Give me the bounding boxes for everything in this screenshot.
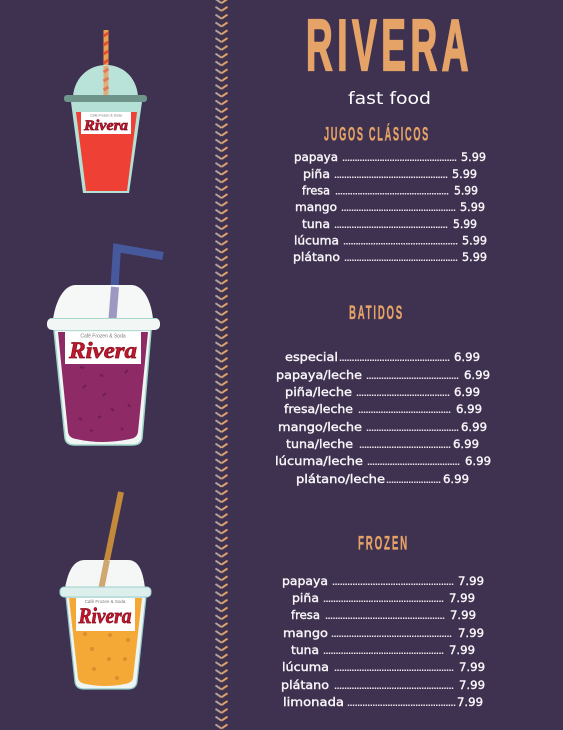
lid rim [60,587,151,597]
logo label: Rivera [78,603,132,628]
price list: jugos clásicos: 5.99 [462,234,487,248]
dome lid [65,560,145,588]
price list: batidos: especial [285,351,338,364]
price list: batidos: 6.99 [456,403,482,416]
price list: batidos: 6.99 [464,369,490,382]
straw seen through lid [104,66,108,96]
price list: frozen: plátano [281,679,329,692]
logo label: Café Frozen & Soda [80,334,126,340]
price list: batidos [275,351,491,486]
logo label: Café Frozen & Soda [85,599,126,604]
price list: jugos clásicos [293,151,487,264]
price list: jugos clásicos: .............................................. [334,221,448,230]
price list: jugos clásicos: .............................................. [341,204,456,213]
lid rim [47,318,160,330]
price list: jugos clásicos: .............................................. [334,171,448,180]
price list: frozen: ................................................ [323,647,444,656]
rim line [50,318,157,320]
fruit specks [83,632,130,680]
price list: frozen: limonada [283,696,344,709]
price list: batidos: ...................... [386,476,441,485]
logo label: Rivera [83,118,129,134]
logo label: Café Frozen & Soda [90,114,122,118]
logo label [76,598,135,631]
price list: frozen: ................................................ [331,630,452,639]
price list: batidos: mango/leche [278,421,362,434]
price list: frozen: ................................................ [334,682,454,691]
price list: frozen: piña [292,592,319,605]
drink: red juice cup [64,30,147,193]
price list: frozen: mango [283,627,328,640]
fruit specks [79,367,130,431]
price list: jugos clásicos: mango [295,201,337,214]
price list: jugos clásicos: piña [303,168,330,181]
straw seen through lid [100,560,107,595]
purple liquid [58,332,148,442]
price list: frozen: 7.99 [449,644,475,657]
chevron divider [215,0,229,730]
logo label: Rivera [68,338,137,363]
price list: jugos clásicos: 5.99 [462,251,487,264]
price list: batidos: piña/leche [285,386,352,399]
cup body [66,597,146,689]
price list: jugos clásicos: 5.99 [454,184,478,198]
price list: frozen: ........................................... [347,699,456,708]
blue bent straw [112,248,163,325]
price list: batidos: tuna/leche [286,438,353,451]
price list: jugos clásicos: 5.99 [452,168,477,181]
price list: jugos clásicos: .............................................. [335,188,449,196]
logo label [81,112,131,134]
price list: batidos: ..................................... [356,389,450,398]
heading: batidos: BATIDOS [349,303,404,324]
price list: jugos clásicos: 5.99 [461,151,486,164]
price list: frozen: 7.99 [457,696,483,709]
price list: batidos: ..................................... [359,441,451,450]
price list: frozen: lúcuma [282,661,329,674]
cup body [71,102,142,193]
drink: purple smoothie cup [47,248,163,445]
price list: batidos: fresa/leche [284,403,353,416]
price list: batidos: plátano/leche [296,473,385,486]
price list: jugos clásicos: lúcuma [294,234,339,248]
price list: frozen: fresa [291,609,320,622]
price list: batidos: ............................................ [339,354,450,363]
price list: frozen: 7.99 [458,627,484,640]
price list: batidos: 6.99 [443,473,469,486]
price list: batidos: lúcuma/leche [275,455,363,468]
drink: orange juice cup [60,492,151,689]
price list: batidos: ..................................... [366,424,459,433]
text: JUGOS CLÁSICOS [324,124,430,146]
price list: jugos clásicos: papaya [294,151,338,164]
subtitle: fast food [348,89,431,109]
price list: jugos clásicos: 5.99 [460,201,485,214]
cup body [54,330,151,445]
price list: frozen: tuna [291,644,319,657]
price list: frozen [281,575,485,709]
price list: jugos clásicos: tuna [302,218,330,231]
price list: frozen: ................................................ [325,612,445,621]
price list: batidos: 6.99 [461,421,487,434]
price list: jugos clásicos: .............................................. [344,254,458,263]
price list: batidos: papaya/leche [276,369,362,382]
price list: batidos: 6.99 [465,455,491,468]
price list: frozen: papaya [282,575,328,588]
price list: batidos: ..................................... [366,372,459,381]
price list: jugos clásicos: fresa [302,184,330,198]
price list: jugos clásicos: .............................................. [342,154,457,163]
price list: jugos clásicos: .............................................. [343,238,458,246]
heading: frozen: FROZEN [358,534,409,554]
price list: frozen: 7.99 [449,592,475,605]
price list: frozen: 7.99 [458,575,484,588]
price list: batidos: 6.99 [453,438,479,451]
price list: batidos: ..................................... [367,458,460,467]
lid rim [64,95,147,102]
price list: frozen: ................................................ [332,578,454,587]
price list: frozen: 7.99 [459,679,485,692]
golden straw [107,492,121,560]
dome lid [53,285,153,319]
red liquid [76,112,137,191]
cup dome lid [73,65,138,96]
price list: frozen: ................................................ [323,595,444,604]
price list: frozen: 7.99 [459,661,485,674]
orange liquid [69,598,142,686]
price list: jugos clásicos: plátano [293,251,340,264]
price list: batidos: 6.99 [454,386,480,399]
price list: batidos: 6.99 [454,351,480,364]
price list: jugos clásicos: 5.99 [453,218,477,231]
price list: batidos: ..................................... [358,406,451,415]
straw seen through lid [112,287,115,325]
price list: frozen: 7.99 [450,609,476,622]
straw: striped [104,30,108,112]
logo label [65,332,141,364]
price list: frozen: ................................................ [334,664,454,673]
